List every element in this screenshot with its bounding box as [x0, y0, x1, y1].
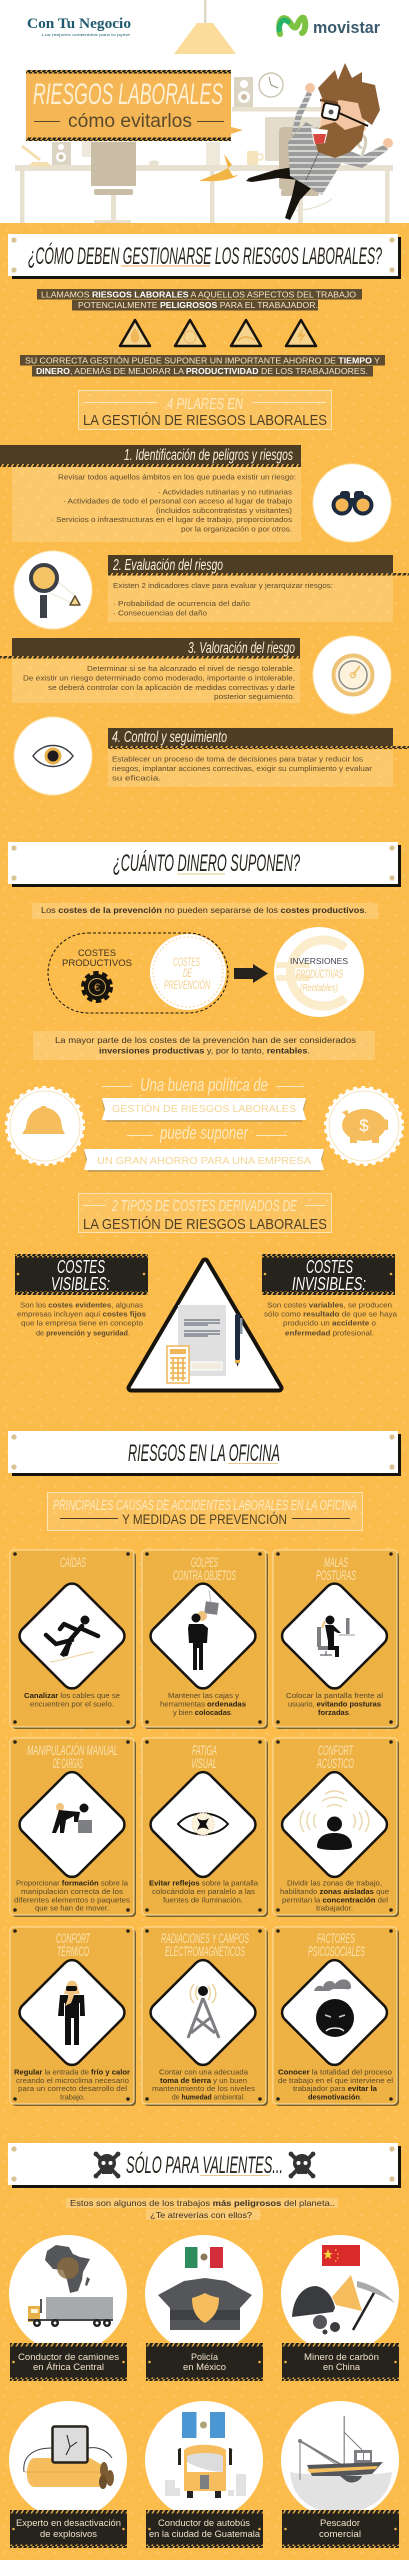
panel: pilar 2: · Consecuencias del daño: [113, 608, 207, 618]
panel: pilar 3: posterior seguimiento.: [214, 692, 295, 701]
text block: gestión: SU CORRECTA GESTIÓN PUEDE SUPONER UN IMPORTANTE AHORRO DE TIEMPO Y: [25, 356, 381, 366]
panel: costes invisibles: COSTES: [306, 1257, 353, 1277]
card: confort acústico: trabajador.: [316, 1904, 353, 1912]
heading: cuánto dinero: [8, 842, 401, 887]
text block: costes de la prevención: Los costes de la prevención no pueden separarse de los costes productivos .: [41, 905, 367, 915]
card: confort térmico: [10, 1927, 136, 2106]
subheading box: 2 tipos de costes: [78, 1194, 332, 1233]
card: malas posturas: forzadas.: [318, 1708, 351, 1717]
diagram: costes productivos y prevención: COSTES: [78, 948, 116, 959]
subheading box: 4 pilares: 4 PILARES EN: [167, 396, 243, 413]
subheading box: 4 pilares: LA GESTIÓN DE RIESGOS LABORALES: [83, 412, 327, 429]
text block: gestión: [20, 355, 385, 376]
card: confort acústico: CONFORT: [318, 1743, 354, 1758]
text block: definición: [37, 289, 362, 310]
card: factores psicosociales: [273, 1927, 399, 2106]
card: manipulación manual de cargas: manipulación correcta de los: [21, 1887, 123, 1896]
card: radiaciones: ELECTROMAGNÉTICOS: [165, 1944, 245, 1959]
text block: mayor parte: [33, 1031, 375, 1060]
title banner: cómo evitarlos: [68, 111, 192, 132]
text block: costes de la prevención: [32, 903, 378, 919]
icon: falling person: [46, 1616, 98, 1656]
icon: person in winter clothes: [58, 1980, 85, 2045]
icon: eye: [14, 717, 92, 795]
icon: time bomb: [24, 2426, 114, 2489]
icon: Mexican flag and police cap: [158, 2247, 252, 2330]
panel: costes invisibles: producido un accidente o: [283, 1318, 376, 1328]
subheading box: 2 tipos de costes: LA GESTIÓN DE RIESGOS LABORALES: [83, 1216, 327, 1233]
card: radiaciones: Contar con una adecuada: [159, 2068, 249, 2076]
card: factores psicosociales: de trabajo en el que interviene el: [278, 2076, 393, 2085]
panel: pilar 1: 1. Identificación de peligros y riesgos: [124, 447, 293, 464]
card: fatiga visual: fuentes de iluminación.: [163, 1896, 243, 1904]
callout: buena política: puede suponer: [159, 1123, 249, 1143]
panel: pilar 1: · Actividades rutinarias y no rutinarias: [158, 488, 292, 496]
job: minero de carbón: en China: [323, 2362, 361, 2372]
illustration: man slipping on a banana: [199, 63, 393, 220]
illustration: office background: [15, 73, 393, 223]
card: confort térmico: CONFORT: [56, 1931, 91, 1946]
panel: pilar 1: por la organización o por otros.: [181, 524, 292, 534]
text block: mayor parte: inversiones productivas y, por lo tanto, rentables .: [99, 1046, 310, 1056]
logo: movistar: [279, 18, 380, 37]
panel: costes visibles: que la empresa tiene en concepto: [21, 1318, 143, 1328]
card: manipulación manual de cargas: Proporcionar formación sobre la: [16, 1878, 129, 1888]
card: malas posturas: [273, 1550, 399, 1729]
logo: Con Tu Negocio: Con Tu Negocio: [27, 16, 131, 32]
panel: costes visibles: [15, 1254, 148, 1338]
job: experto en explosivos: [9, 2401, 127, 2548]
card: confort térmico: trabajo.: [60, 2092, 85, 2102]
card: factores psicosociales: trabajador para evitar la: [293, 2084, 378, 2093]
icon: ceiling lamp: [174, 0, 236, 54]
card: confort acústico: ACÚSTICO: [316, 1756, 354, 1771]
job: experto en explosivos: Experto en desactivación: [16, 2518, 121, 2528]
icon: magnifying glass: [14, 551, 92, 629]
text block: gestión: DINERO , ADEMÁS DE MEJORAR LA PRODUCTIVIDAD DE LOS TRABAJADORES.: [36, 367, 368, 376]
card: fatiga visual: Evitar reflejos sobre la pantalla: [149, 1878, 259, 1888]
subheading box: 2 tipos de costes: 2 TIPOS DE COSTES DERIVADOS DE: [111, 1198, 297, 1215]
card: confort térmico: creando el microclima necesario: [16, 2076, 129, 2085]
card: caídas: [10, 1550, 136, 1729]
panel: pilar 1: · Servicios o infraestructuras en el lugar de trabajo, proporcionados: [51, 515, 292, 524]
panel: pilar 1: [0, 445, 301, 542]
card: fatiga visual: VISUAL: [191, 1756, 217, 1771]
panel: costes visibles: COSTES: [57, 1257, 105, 1277]
heading: cómo gestionar: [8, 234, 401, 279]
text block: trabajos peligrosos: ¿Te atreverías con ellos?: [150, 2210, 252, 2220]
icon: person surrounded by noise: [300, 1791, 369, 1850]
panel: pilar 3: De existir un riesgo determinado como moderado, importante o intolerable,: [23, 674, 295, 682]
panel: costes invisibles: sólo como resultado de que se haya: [264, 1310, 398, 1318]
panel: pilar 3: 3. Valoración del riesgo: [188, 640, 295, 657]
card: factores psicosociales: desmotivación.: [308, 2092, 362, 2102]
text block: trabajos peligrosos: Estos son algunos de los trabajos más peligrosos del planeta..: [70, 2198, 335, 2208]
card: manipulación manual de cargas: DE CARGAS: [53, 1756, 83, 1771]
icon: binoculars: [313, 464, 391, 542]
diagram: costes productivos y prevención: [48, 927, 364, 1017]
icon: sad face with cloud: [314, 1979, 354, 2037]
card: malas posturas: usuario, evitando posturas: [288, 1700, 381, 1708]
job: conductor de camiones: en África Central: [33, 2362, 104, 2372]
job: policía en México: Policía: [191, 2352, 219, 2362]
callout: buena política: [84, 1075, 324, 1172]
icon: warning triangle with document and calculator: [131, 1262, 279, 1388]
panel: pilar 3: se deberá controlar con la aplicación de medidas correctivas y darle: [48, 683, 295, 692]
job: pescador comercial: Pescador: [320, 2518, 360, 2528]
card: confort térmico: para un correcto desarrollo del: [18, 2084, 127, 2093]
diagram: costes productivos y prevención: COSTES: [173, 955, 200, 969]
card: fatiga visual: colocándola en paralelo a las: [152, 1887, 255, 1896]
card: manipulación manual de cargas: diferentes elementos o paquetes: [14, 1896, 130, 1904]
subheading box: 4 pilares: [78, 390, 332, 430]
card: malas posturas: Colocar la pantalla frente al: [286, 1691, 383, 1700]
logo: movistar: movistar: [313, 18, 380, 37]
panel: pilar 4: [108, 728, 409, 787]
card: factores psicosociales: Conocer la totalidad del proceso: [278, 2068, 392, 2076]
card: radiaciones: de humedad ambiental.: [172, 2092, 245, 2102]
heading: sólo para valientes: [8, 2143, 401, 2188]
card: confort acústico: [273, 1738, 399, 1917]
icon: euro gear: [84, 974, 110, 1000]
callout: buena política: UN GRAN AHORRO PARA UNA EMPRESA: [97, 1155, 311, 1167]
diagram: costes productivos y prevención: PRODUCTIVOS: [62, 958, 132, 969]
diagram: costes productivos y prevención: PREVENCIÓN: [164, 977, 210, 992]
text block: definición: LLAMAMOS RIESGOS LABORALES A AQUELLOS ASPECTOS DEL TRABAJO: [41, 290, 356, 300]
card: fatiga visual: [142, 1738, 268, 1917]
panel: pilar 4: 4. Control y seguimiento: [112, 729, 227, 746]
card: radiaciones: [142, 1927, 268, 2106]
card: confort térmico: TÉRMICO: [57, 1944, 89, 1959]
panel: pilar 3: Determinar si se ha alcanzado el nivel de riesgo tolerable.: [87, 664, 295, 673]
logo: Con Tu Negocio: Los mejores contenidos para tu pyme: [42, 32, 131, 37]
seal: piggy bank: [326, 1088, 402, 1164]
panel: pilar 1: Revisar todos aquellos ámbitos en los que pueda existir un riesgo:: [58, 472, 296, 482]
diagram: costes productivos y prevención: DE: [183, 966, 193, 980]
card: malas posturas: POSTURAS: [316, 1568, 356, 1583]
card: caídas: Canalizar los cables que se: [24, 1691, 120, 1700]
job: conductor de autobús: [145, 2401, 263, 2548]
heading: riesgos en la oficina: RIESGOS EN LA OFICINA: [128, 1440, 280, 1467]
card: confort acústico: permitan la concentración del: [282, 1896, 388, 1904]
card: golpes contra objetos: herramientas ordenadas: [160, 1700, 246, 1708]
job: conductor de camiones: [9, 2235, 127, 2381]
heading: riesgos en la oficina: [8, 1431, 401, 1476]
panel: costes visibles: Son los costes evidentes, algunas: [20, 1300, 143, 1310]
panel: pilar 2: [108, 555, 409, 622]
icon: risk gauge: [313, 636, 391, 714]
text block: trabajos peligrosos: [66, 2198, 338, 2220]
panel: pilar 2: 2. Evaluación del riesgo: [112, 557, 223, 574]
card: golpes contra objetos: y bien colocadas.: [173, 1708, 233, 1717]
icons: warning triangles: [120, 320, 316, 346]
seal: helmet: [7, 1088, 83, 1164]
panel: pilar 2: · Probabilidad de ocurrencia del daño: [113, 599, 250, 608]
job: experto en explosivos: de explosivos: [40, 2529, 97, 2539]
job: conductor de autobús: en la ciudad de Guatemala: [149, 2529, 261, 2539]
card: manipulación manual de cargas: [10, 1738, 136, 1917]
icon: person lifting box: [52, 1803, 92, 1833]
icon: tired eye: [178, 1813, 228, 1835]
card: golpes contra objetos: GOLPES: [191, 1555, 218, 1570]
panel: pilar 3: [0, 638, 300, 703]
panel: pilar 1: (incluidos subcontratistas y visitantes): [156, 506, 292, 515]
panel: costes visibles: VISIBLES:: [51, 1274, 110, 1294]
icon: antenna tower: [188, 1984, 219, 2038]
panel: costes visibles: empresas incluyen aquí costes fijos: [17, 1310, 146, 1318]
arrow: [234, 964, 268, 983]
panel: costes invisibles: [262, 1254, 398, 1338]
card: radiaciones: mantenimiento de los niveles: [152, 2084, 255, 2093]
circle: inversiones productivas: [274, 927, 364, 1017]
subheading box: principales causas: Y MEDIDAS DE PREVENCIÓN: [122, 1512, 287, 1527]
panel: costes invisibles: enfermedad profesional.: [285, 1328, 374, 1338]
card: fatiga visual: FATIGA: [192, 1743, 217, 1758]
card: caídas: encuentren por el suelo.: [30, 1700, 114, 1708]
card: golpes contra objetos: [142, 1550, 268, 1729]
panel: costes invisibles: Son costes variables, se producen: [267, 1300, 392, 1310]
card: confort acústico: habilitando zonas aisladas que: [280, 1887, 389, 1896]
card: manipulación manual de cargas: que se han de mover.: [35, 1904, 109, 1912]
job: conductor de autobús: Conductor de autobús: [158, 2518, 250, 2528]
callout: buena política: GESTIÓN DE RIESGOS LABORALES: [112, 1102, 296, 1115]
circle: inversiones productivas: PRODUCTIVAS: [296, 967, 343, 981]
panel: pilar 2: Existen 2 indicadores clave para evaluar y jerarquizar riesgos:: [113, 581, 333, 590]
panel: pilar 4: Establecer un proceso de toma de decisiones para tratar y reducir los: [112, 754, 363, 764]
card: factores psicosociales: FACTORES: [317, 1931, 355, 1946]
text block: mayor parte: La mayor parte de los costes de la prevención han de ser considerados: [55, 1035, 356, 1045]
job: policía en México: en México: [183, 2362, 226, 2372]
card: confort acústico: Dividir las zonas de trabajo,: [287, 1878, 382, 1888]
icon: seated person at computer: [317, 1616, 355, 1657]
job: policía en México: [145, 2235, 263, 2381]
panel: costes invisibles: INVISIBLES:: [292, 1274, 366, 1294]
icon: person hit by object: [188, 1590, 219, 1670]
panel: costes visibles: de prevención y seguridad.: [36, 1328, 130, 1338]
seal: piggy bank: $: [359, 1116, 369, 1135]
circle: inversiones productivas: INVERSIONES: [290, 956, 348, 966]
card: caídas: CAÍDAS: [60, 1555, 86, 1570]
card: radiaciones: toma de tierra y un buen: [160, 2076, 247, 2085]
icon: fishing boat: [290, 2416, 392, 2515]
card: confort térmico: Regular la entrada de frío y calor: [14, 2068, 130, 2076]
card: golpes contra objetos: CONTRA OBJETOS: [173, 1568, 236, 1583]
card: manipulación manual de cargas: MANIPULACIÓN MANUAL: [27, 1743, 118, 1758]
icon: euro gear: €: [94, 982, 100, 994]
panel: pilar 4: su eficacia.: [112, 774, 161, 782]
icon: Chinese flag, helmet and pickaxe: [292, 2245, 395, 2334]
job: conductor de camiones: Conductor de camiones: [18, 2352, 119, 2362]
subheading box: principales causas: [48, 1492, 362, 1530]
icon: Guatemalan flag and bus: [165, 2412, 246, 2498]
title banner: RIESGOS LABORALES: [33, 78, 223, 111]
title banner: [26, 70, 243, 141]
card: radiaciones: RADIACIONES Y CAMPOS: [161, 1931, 249, 1946]
job: minero de carbón: [281, 2235, 399, 2381]
text block: definición: POTENCIALMENTE PELIGROSOS PARA EL TRABAJADOR.: [78, 301, 318, 310]
job: pescador comercial: [281, 2401, 399, 2548]
circle: inversiones productivas: (Rentables): [300, 983, 338, 994]
job: pescador comercial: comercial: [319, 2529, 361, 2539]
panel: pilar 1: · Actividades de todo el personal con acceso al lugar de trabajo: [63, 496, 292, 506]
card: golpes contra objetos: Mantener las cajas y: [168, 1691, 239, 1700]
card: malas posturas: MALAS: [324, 1555, 348, 1570]
callout: buena política: Una buena política de: [140, 1075, 268, 1095]
job: minero de carbón: Minero de carbón: [304, 2352, 379, 2362]
panel: pilar 4: riesgos, implantar acciones correctivas, exigir su cumplimiento y evaluar: [112, 764, 372, 773]
icon: Africa and truck: [28, 2245, 113, 2327]
